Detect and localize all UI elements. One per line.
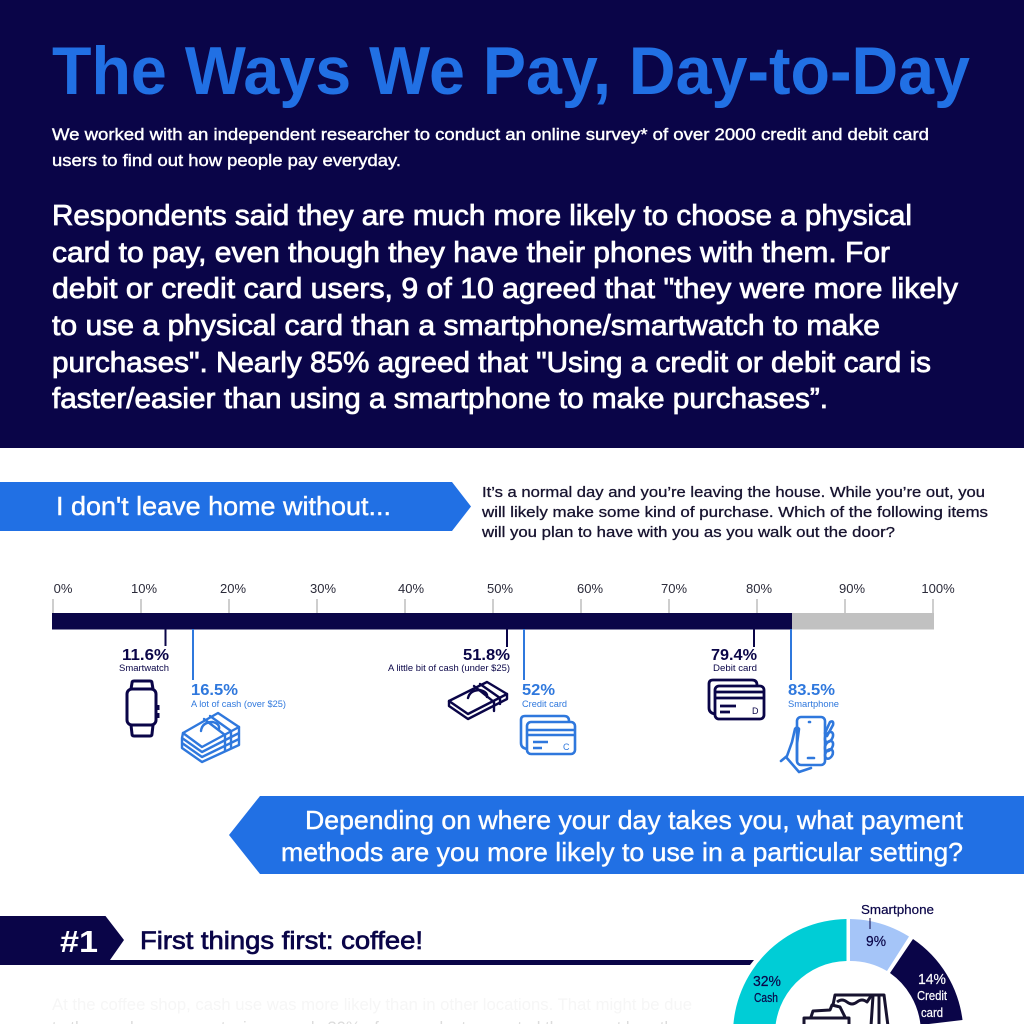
label: smartphone: 9%	[866, 933, 886, 950]
segment: smartphone 9%	[850, 919, 909, 971]
banner: where your day takes you: methods are you more likely to use in a particular setting?	[281, 837, 963, 867]
callout: a lot of cash 16.5%: A lot of cash (over $25)	[191, 699, 286, 709]
chart: percentage axis and bar: 60%	[577, 581, 603, 596]
title: The Ways We Pay, Day-to-Day	[52, 33, 970, 109]
label: cash	[753, 973, 781, 1005]
panel: header	[0, 0, 1024, 448]
chart: percentage axis and bar: 70%	[661, 581, 687, 596]
intro text: users to find out how people pay everyday.	[52, 152, 401, 170]
callout: smartwatch 11.6%	[119, 629, 169, 736]
label: smartphone: Smartphone	[861, 902, 934, 917]
label: credit card: Credit	[917, 988, 947, 1003]
question text: It’s a normal day and you’re leaving the house. While you’re out, you	[482, 484, 985, 501]
segment: cash 32%	[733, 919, 846, 1024]
label: credit card: 14%	[918, 971, 946, 988]
key findings text: to use a physical card than a smartphone/smartwatch to make	[52, 310, 880, 342]
key findings text: faster/easier than using a smartphone to make purchases”.	[52, 383, 828, 415]
chart: percentage axis and bar: 20%	[220, 581, 246, 596]
banner: where your day takes you: Depending on where your day takes you, what payment	[305, 805, 964, 835]
key findings text: card to pay, even though they have their phones with them. For	[52, 237, 890, 269]
intro text: We worked with an independent researcher to conduct an online survey* of over 2000 credit and debit card	[52, 126, 929, 144]
faded body text	[52, 995, 692, 1024]
section header: #1 coffee: #1	[60, 924, 98, 959]
key findings text	[52, 200, 959, 415]
banner: I don't leave home without: I don't leave home without...	[56, 491, 391, 521]
callout: a little bit of cash 51.8%: 51.8%	[463, 647, 510, 664]
callout: debit card 79.4%: 79.4%	[711, 647, 757, 664]
question text	[481, 484, 988, 541]
label: credit card	[917, 971, 947, 1020]
icon: coffee cups	[804, 995, 888, 1024]
segment: credit card 14%	[890, 939, 962, 1024]
callout: credit card 52%: C	[563, 742, 570, 752]
faded body text: At the coffee shop, cash use was more likely than in other locations. That might be due	[52, 995, 692, 1014]
key findings text: debit or credit card users, 9 of 10 agreed that "they were more likely	[52, 273, 959, 305]
chart: percentage axis and bar: 30%	[310, 581, 336, 596]
question text: will you plan to have with you as you walk out the door?	[481, 524, 895, 541]
callout: smartwatch 11.6%: Smartwatch	[119, 663, 169, 673]
chart: percentage axis and bar: 10%	[131, 581, 157, 596]
chart: percentage axis and bar	[52, 581, 955, 630]
chart: percentage axis and bar: 0%	[54, 581, 73, 596]
label: smartphone	[861, 902, 934, 950]
callout: a little bit of cash 51.8%	[388, 629, 510, 719]
callout: smartphone 83.5%	[781, 629, 839, 772]
callout: debit card 79.4%: Debit card	[713, 663, 757, 673]
chart: percentage axis and bar: 40%	[398, 581, 424, 596]
chart: percentage axis and bar: 50%	[487, 581, 513, 596]
label: cash: 32%	[753, 973, 781, 990]
callout: smartphone 83.5%: Smartphone	[788, 699, 839, 709]
chart: percentage axis and bar: 80%	[746, 581, 772, 596]
intro text	[52, 126, 929, 170]
callout: debit card 79.4%: D	[752, 706, 759, 716]
chart: percentage axis and bar: 100%	[921, 581, 955, 596]
banner: I don't leave home without	[0, 482, 471, 531]
donut chart: coffee payments	[733, 902, 962, 1024]
question text: will likely make some kind of purchase. Which of the following items	[481, 504, 988, 521]
section header: #1 coffee	[0, 916, 754, 965]
callout: credit card 52%: 52%	[522, 682, 555, 699]
callout: a little bit of cash 51.8%: A little bit of cash (under $25)	[388, 663, 510, 673]
callout: credit card 52%: Credit card	[522, 699, 567, 709]
callout: credit card 52%	[521, 629, 575, 754]
callout: smartwatch 11.6%: 11.6%	[122, 647, 169, 664]
section header: #1 coffee: First things first: coffee!	[140, 927, 423, 955]
callout: smartphone 83.5%: 83.5%	[788, 682, 835, 699]
callout: a lot of cash 16.5%	[182, 629, 286, 762]
key findings text: Respondents said they are much more likely to choose a physical	[52, 200, 912, 232]
chart: percentage axis and bar: 90%	[839, 581, 865, 596]
callout: a lot of cash 16.5%: 16.5%	[191, 682, 238, 699]
banner: where your day takes you	[229, 796, 1024, 874]
label: cash: Cash	[754, 990, 778, 1005]
callout: debit card 79.4%	[709, 629, 764, 719]
label: credit card: card	[921, 1005, 943, 1020]
key findings text: purchases". Nearly 85% agreed that "Using a credit or debit card is	[52, 347, 931, 379]
